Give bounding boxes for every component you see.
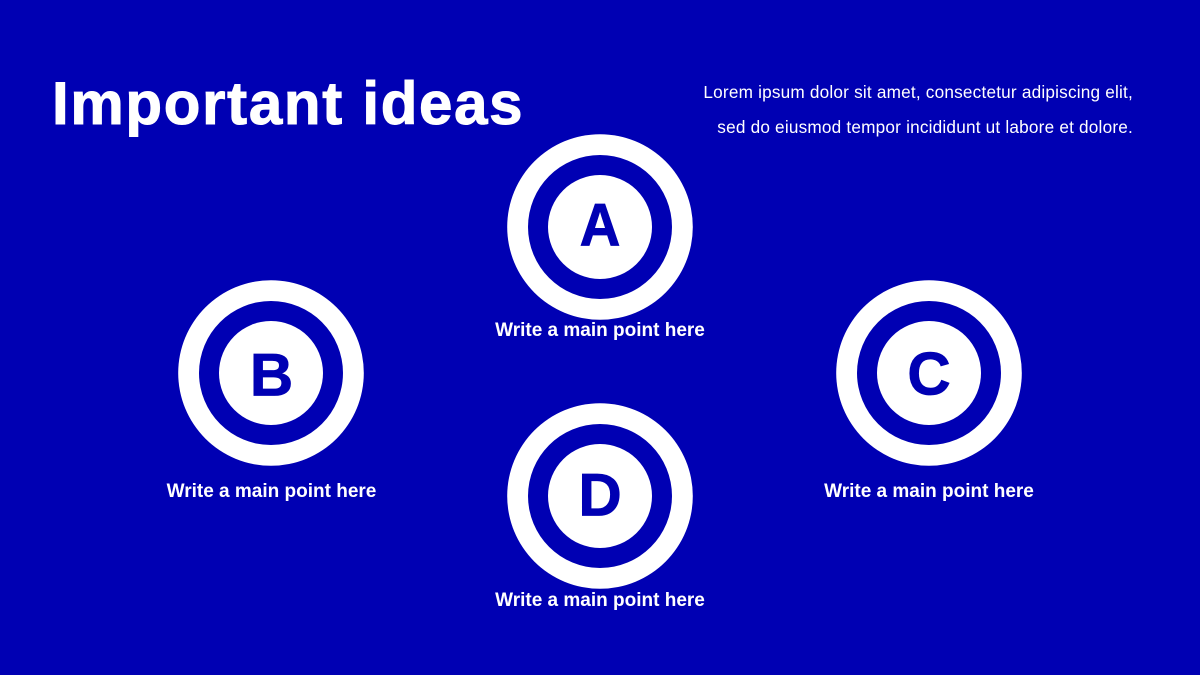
circle A [507,134,693,320]
label C: Write a main point here [824,481,1034,502]
intro text block: Lorem ipsum dolor sit amet, consectetur adipiscing elit, [703,82,1133,102]
circle B [178,280,364,466]
circle A: A [580,192,620,259]
circle C: C [907,341,950,408]
title: Important ideas [52,70,524,137]
label D: Write a main point here [495,590,705,611]
circle D: D [578,462,622,529]
intro text block [703,82,1133,137]
circle D [507,403,693,589]
circle C [836,280,1022,466]
label B: Write a main point here [167,481,376,502]
intro text block: sed do eiusmod tempor incididunt ut labore et dolore. [717,117,1133,137]
label A: Write a main point here [495,320,705,341]
circle B: B [250,341,293,408]
